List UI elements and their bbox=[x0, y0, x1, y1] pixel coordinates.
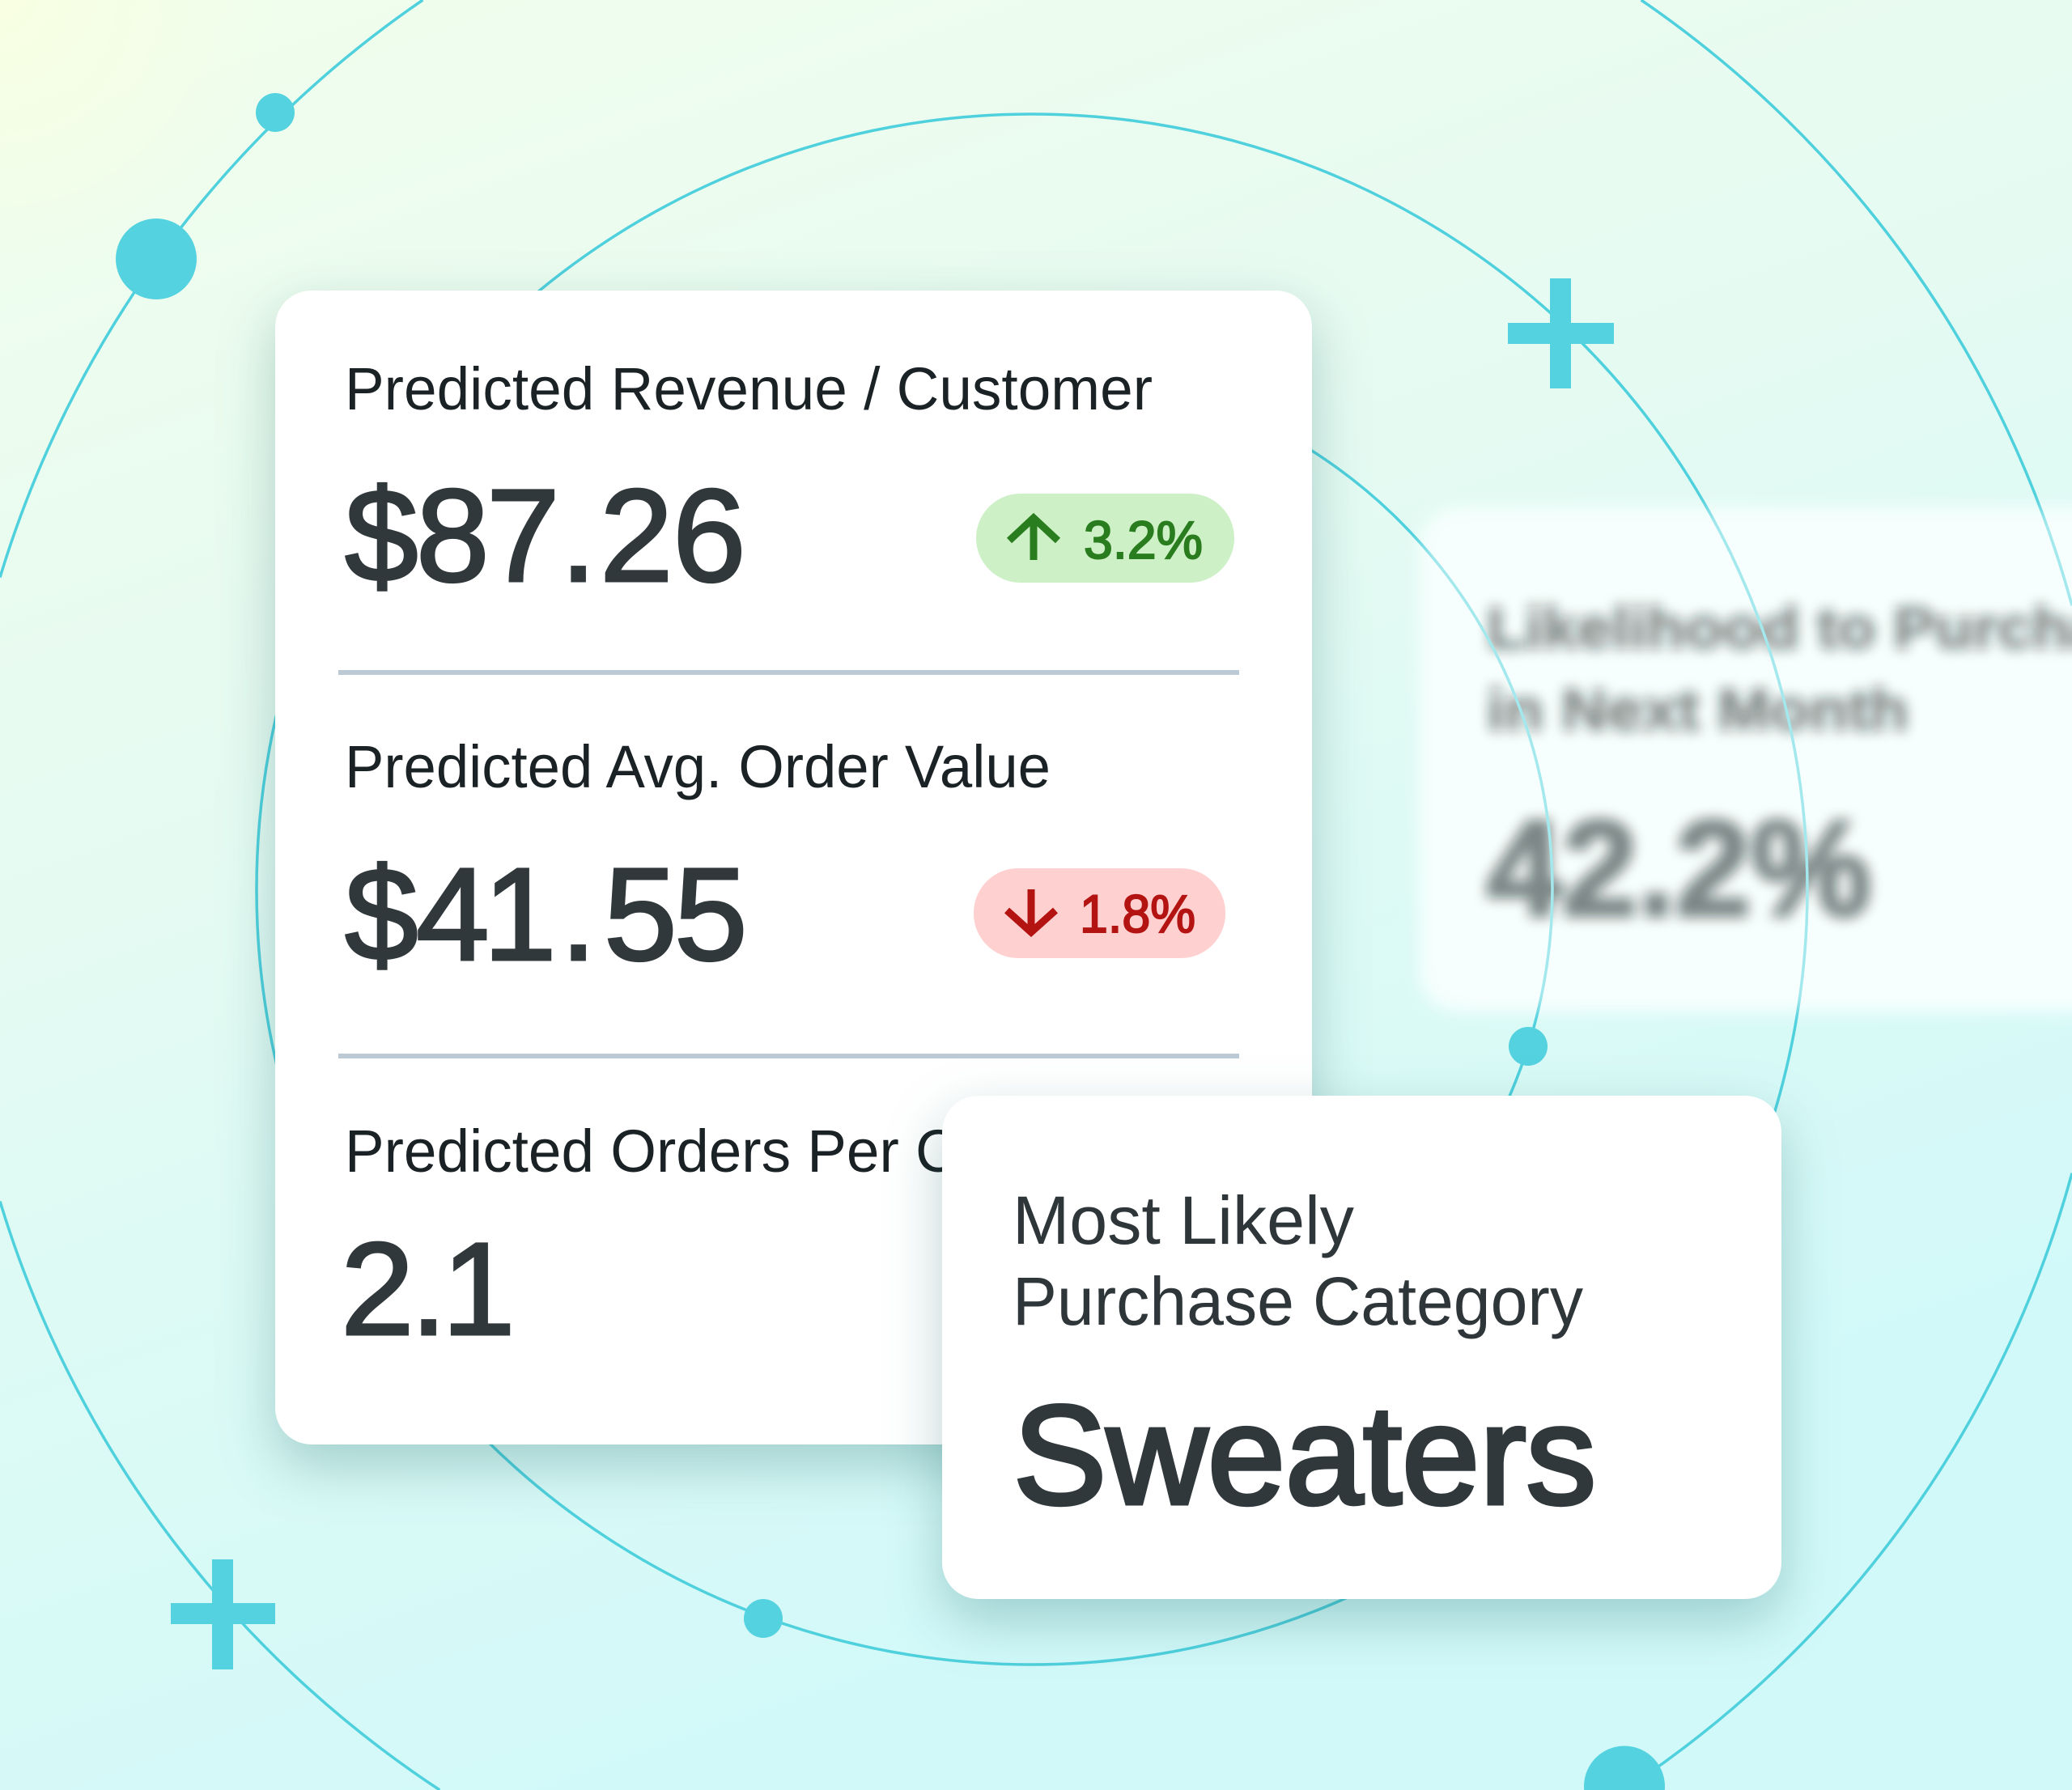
label: predicted orders per customer: Predicted Orders Per Customer bbox=[345, 1118, 1171, 1185]
value: revenue: $87.26 bbox=[345, 461, 746, 609]
label: predicted average order value: Predicted Avg. Order Value bbox=[345, 733, 1051, 800]
label: most likely purchase category: Most Likely bbox=[1013, 1182, 1354, 1258]
panel: predicted metrics card bbox=[275, 291, 1312, 1444]
badge: down 1.8%: 1.8% bbox=[1080, 884, 1195, 944]
badge: down 1.8% bbox=[974, 868, 1225, 958]
divider bbox=[338, 670, 1239, 675]
badge: up 3.2% bbox=[976, 494, 1234, 583]
icon: down arrow bbox=[1007, 889, 1055, 932]
label: most likely purchase category bbox=[1013, 1182, 1583, 1339]
blurred background card: likelihood to purchase bbox=[1422, 510, 2072, 1009]
blurred card text bbox=[1487, 596, 2072, 944]
icon: up arrow bbox=[1009, 518, 1058, 560]
icon: plus bottom left bbox=[171, 1559, 275, 1669]
value: average order value: $41.55 bbox=[345, 840, 748, 988]
label: most likely purchase category: Purchase Category bbox=[1013, 1263, 1583, 1339]
value: sweaters: Sweaters bbox=[1013, 1376, 1596, 1533]
blurred card text: 42.2% bbox=[1487, 792, 1871, 944]
badge: up 3.2%: 3.2% bbox=[1084, 510, 1203, 570]
icon: plus top right bbox=[1508, 278, 1614, 388]
value: orders: 2.1 bbox=[341, 1215, 516, 1363]
panel: most likely purchase category card bbox=[942, 1096, 1781, 1599]
label: predicted revenue: Predicted Revenue / Customer bbox=[345, 355, 1153, 422]
orbit dots bbox=[116, 93, 1665, 1790]
divider bbox=[338, 1054, 1239, 1058]
blurred card text: in Next Month bbox=[1487, 678, 1909, 743]
frosted overlay fading the rings across the blurred card bbox=[1422, 510, 2072, 1009]
